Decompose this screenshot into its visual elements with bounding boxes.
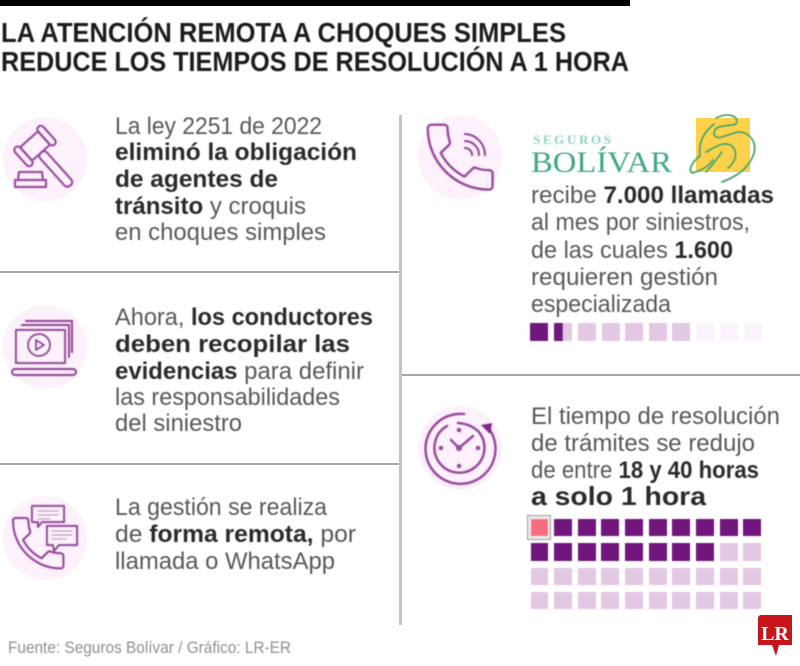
text: evidencias: evidencias para definir — [115, 358, 364, 385]
logo: Seguros Bolívar: SEGUROS — [533, 132, 611, 147]
panel: gestión remota — [3, 494, 356, 580]
text: evidencias: del siniestro — [115, 410, 242, 437]
text: tiempo de resolución: a solo 1 hora — [531, 481, 707, 511]
title: REDUCE LOS TIEMPOS DE RESOLUCIÓN A 1 HORA — [1, 46, 629, 77]
title — [1, 17, 629, 77]
text: evidencias: Ahora, los conductores — [115, 304, 373, 331]
panel: ley 2251 — [3, 113, 357, 246]
text: llamadas: al mes por siniestros, — [531, 209, 750, 236]
text: ley 2251 — [115, 113, 357, 246]
icon: video — [3, 305, 87, 389]
panel: llamadas — [418, 115, 774, 341]
title: LA ATENCIÓN REMOTA A CHOQUES SIMPLES — [1, 17, 566, 48]
logo: Seguros Bolívar — [531, 115, 755, 182]
text: evidencias — [115, 304, 373, 437]
icon: phone call — [418, 115, 502, 199]
text: evidencias: deben recopilar las — [115, 331, 350, 358]
text: llamadas: requieren gestión — [531, 264, 718, 291]
logo: LR — [758, 615, 792, 656]
text: gestión remota: La gestión se realiza — [115, 494, 328, 521]
text: llamadas — [531, 182, 774, 318]
text: evidencias: las responsabilidades — [115, 384, 340, 411]
panel: tiempo de resolución — [418, 403, 780, 609]
logo: LR: LR — [761, 623, 789, 645]
text: ley 2251: eliminó la obligación — [115, 139, 357, 166]
panel: evidencias — [3, 304, 373, 437]
text: tiempo de resolución: de trámites se redujo — [531, 430, 755, 457]
text: tiempo de resolución: El tiempo de resolución — [531, 403, 780, 430]
text: llamadas: de las cuales 1.600 — [531, 237, 733, 264]
text: ley 2251: La ley 2251 de 2022 — [115, 113, 322, 140]
text: llamadas: especializada — [531, 291, 672, 318]
icon: phone with chat bubbles — [3, 496, 87, 580]
text: gestión remota: de forma remota, por — [115, 521, 356, 548]
source: Fuente: Seguros Bolívar / Gráfico: LR-ER — [8, 638, 291, 657]
icon: gavel — [3, 117, 87, 201]
text: llamadas: recibe 7.000 llamadas — [531, 182, 774, 209]
text: gestión remota — [115, 494, 356, 575]
text: ley 2251: de agentes de — [115, 166, 278, 193]
chart: tiempo squares — [528, 516, 761, 609]
logo: Seguros Bolívar: BOLÍVAR — [531, 146, 672, 179]
text: gestión remota: llamada o WhatsApp — [115, 548, 335, 575]
text: ley 2251: en choques simples — [115, 219, 326, 246]
icon: clock — [418, 406, 502, 490]
text: ley 2251: tránsito y croquis — [115, 193, 306, 220]
text: tiempo de resolución: de entre 18 y 40 horas — [531, 457, 759, 484]
text: tiempo de resolución — [531, 403, 780, 511]
chart: llamadas squares — [530, 323, 762, 341]
top bar — [0, 0, 630, 6]
